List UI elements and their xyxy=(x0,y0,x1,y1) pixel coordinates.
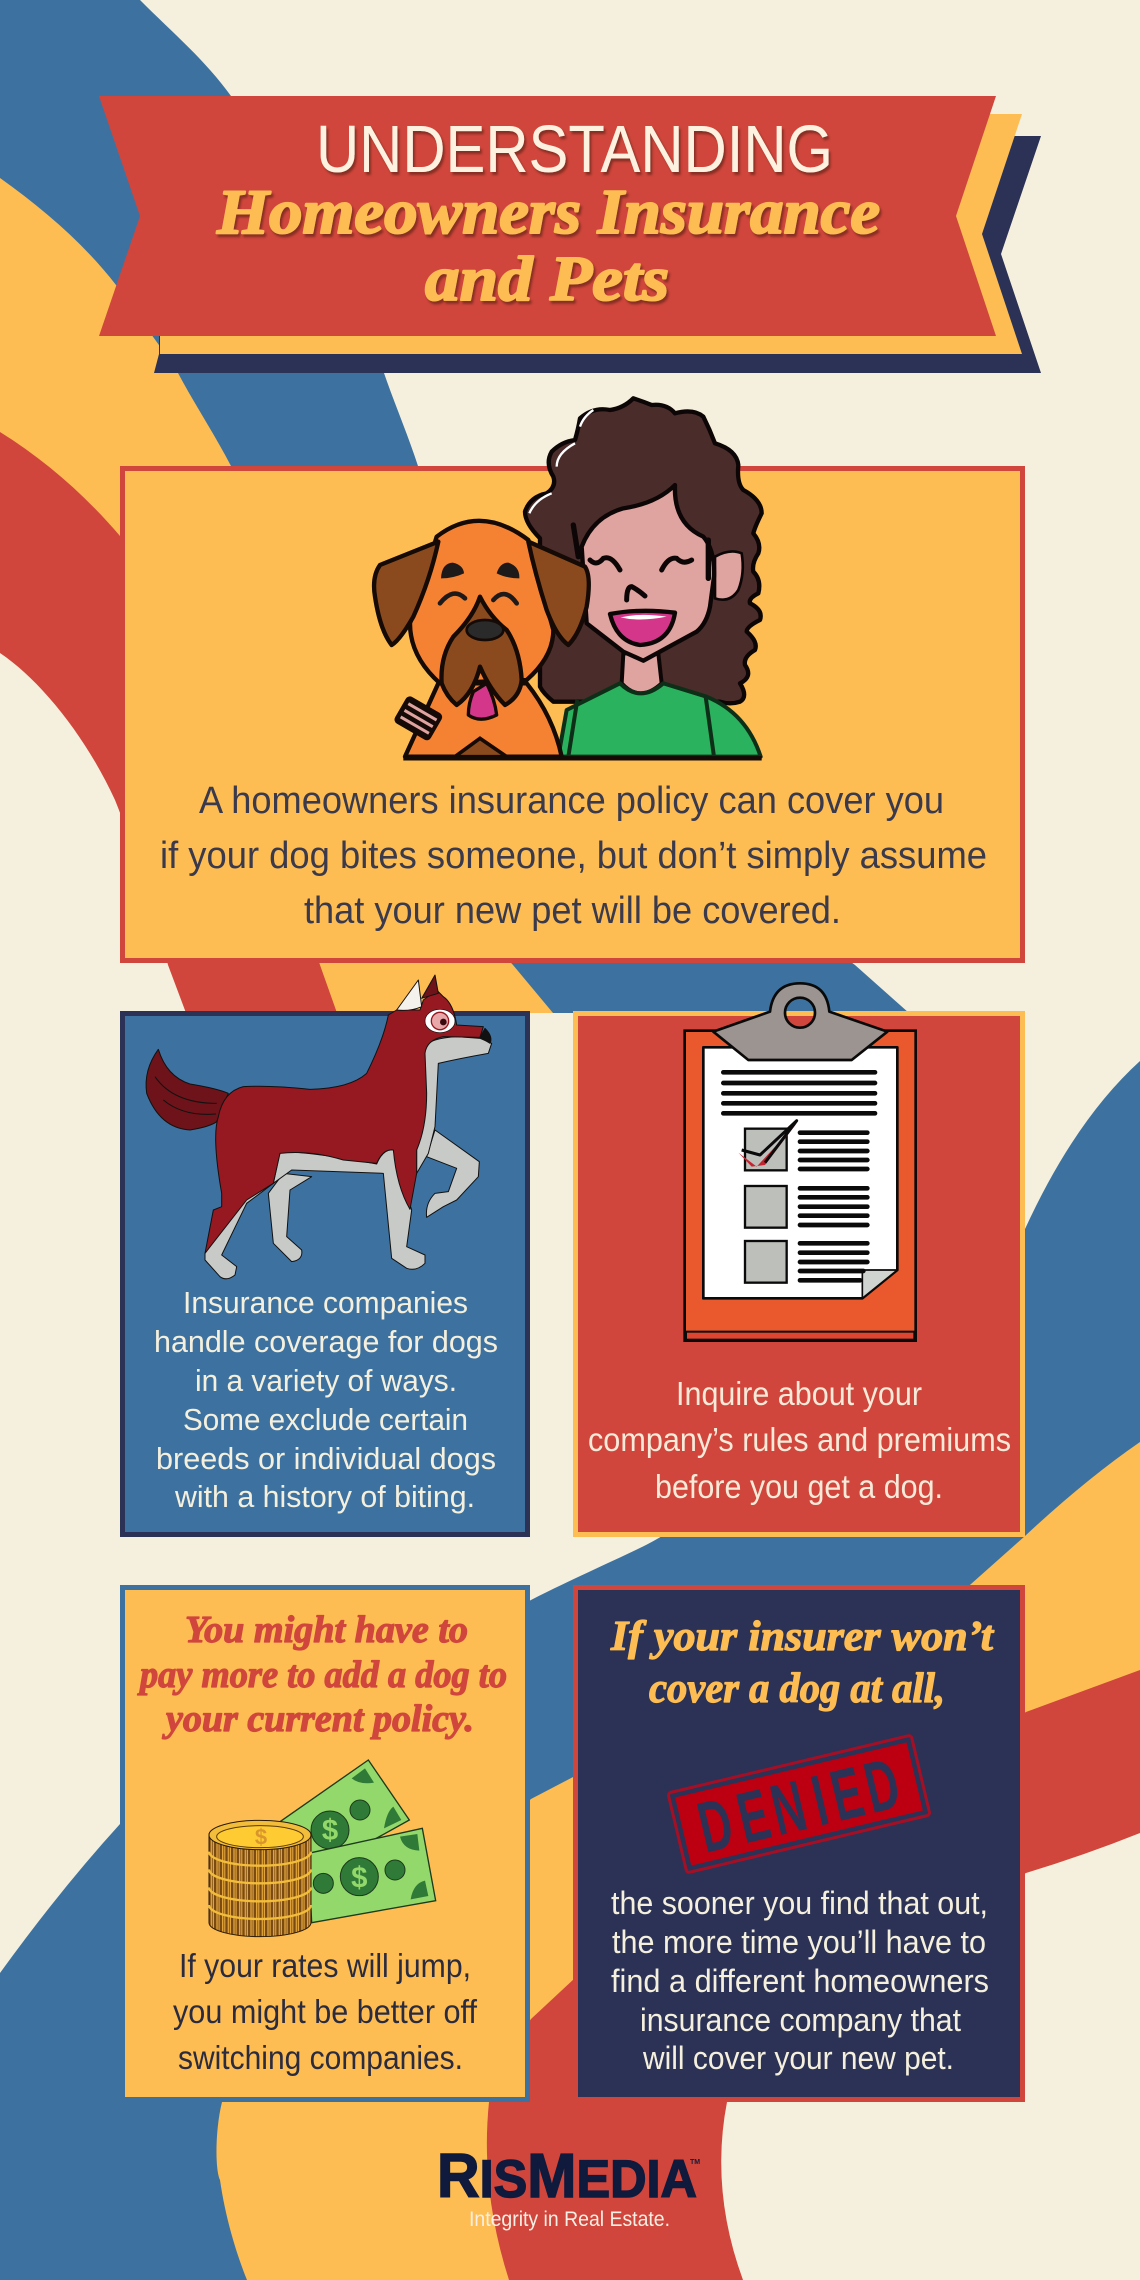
text: coverage by breed: breeds or individual dogs xyxy=(156,1441,496,1476)
heading: pay more: pay more to add a dog to xyxy=(137,1654,507,1696)
icon: denied stamp: DENIED xyxy=(690,1743,907,1868)
title text xyxy=(216,112,880,314)
title text: UNDERSTANDING xyxy=(316,112,833,187)
text: sooner you find out xyxy=(611,1885,989,2076)
panel: paying more xyxy=(122,1588,528,2100)
text: intro xyxy=(160,780,987,932)
text: sooner you find out: find a different homeowners xyxy=(611,1963,989,1999)
text: coverage by breed: with a history of biting. xyxy=(174,1479,475,1514)
text: intro: A homeowners insurance policy can cover you xyxy=(199,780,944,822)
heading: insurer won't cover: If your insurer won’t xyxy=(610,1614,994,1660)
icon: woman hugging dog xyxy=(374,398,762,758)
heading: pay more: your current policy. xyxy=(162,1698,474,1740)
text: coverage by breed: Some exclude certain xyxy=(183,1402,468,1437)
text: rates jump: switching companies. xyxy=(178,2039,463,2076)
panel: insurer denial xyxy=(576,1588,1022,2100)
title text: and Pets xyxy=(425,243,669,314)
text: coverage by breed: Insurance companies xyxy=(183,1285,468,1320)
logo: RisMedia: Integrity in Real Estate. xyxy=(469,2208,670,2231)
text: sooner you find out: the sooner you find that out, xyxy=(611,1885,988,1921)
heading: insurer won't cover xyxy=(610,1614,994,1712)
text: rates jump: If your rates will jump, xyxy=(179,1947,471,1984)
heading: insurer won't cover: cover a dog at all, xyxy=(649,1666,945,1712)
heading: pay more xyxy=(137,1609,507,1740)
panel: dog bite coverage xyxy=(122,398,1022,960)
logo: RisMedia: TM xyxy=(690,2159,700,2166)
text: rates jump: you might be better off xyxy=(173,1993,478,2030)
panel: inquire about rules xyxy=(576,983,1022,1534)
text: inquire about rules: company’s rules and premiums xyxy=(588,1421,1011,1458)
text: coverage by breed: handle coverage for dogs xyxy=(154,1324,498,1359)
text: coverage by breed: in a variety of ways. xyxy=(195,1363,457,1398)
icon: coins and banknotes xyxy=(209,1760,436,1937)
text: inquire about rules: Inquire about your xyxy=(676,1375,922,1412)
title text: Homeowners Insurance xyxy=(216,176,880,247)
icon: clipboard checklist xyxy=(685,983,916,1341)
icon: coins and banknotes: $ xyxy=(255,1825,267,1850)
text: inquire about rules: before you get a dog. xyxy=(655,1468,943,1505)
panel: coverage by breed xyxy=(122,975,528,1534)
text: sooner you find out: will cover your new pet. xyxy=(642,2040,954,2076)
text: sooner you find out: the more time you’ll have to xyxy=(612,1924,986,1960)
text: inquire about rules xyxy=(588,1375,1011,1505)
text: intro: if your dog bites someone, but don’t simply assume xyxy=(160,835,987,877)
icon: coins and banknotes: $ xyxy=(351,1861,367,1894)
text: sooner you find out: insurance company that xyxy=(640,2002,961,2038)
title banner xyxy=(99,96,1041,373)
icon: walking dog xyxy=(146,975,492,1279)
heading: pay more: You might have to xyxy=(185,1609,468,1651)
logo: RisMedia: RISMEDIA xyxy=(437,2142,697,2211)
text: rates jump xyxy=(173,1947,478,2076)
icon: coins and banknotes: $ xyxy=(322,1814,338,1847)
text: intro: that your new pet will be covered. xyxy=(304,890,841,932)
text: coverage by breed xyxy=(154,1285,498,1514)
